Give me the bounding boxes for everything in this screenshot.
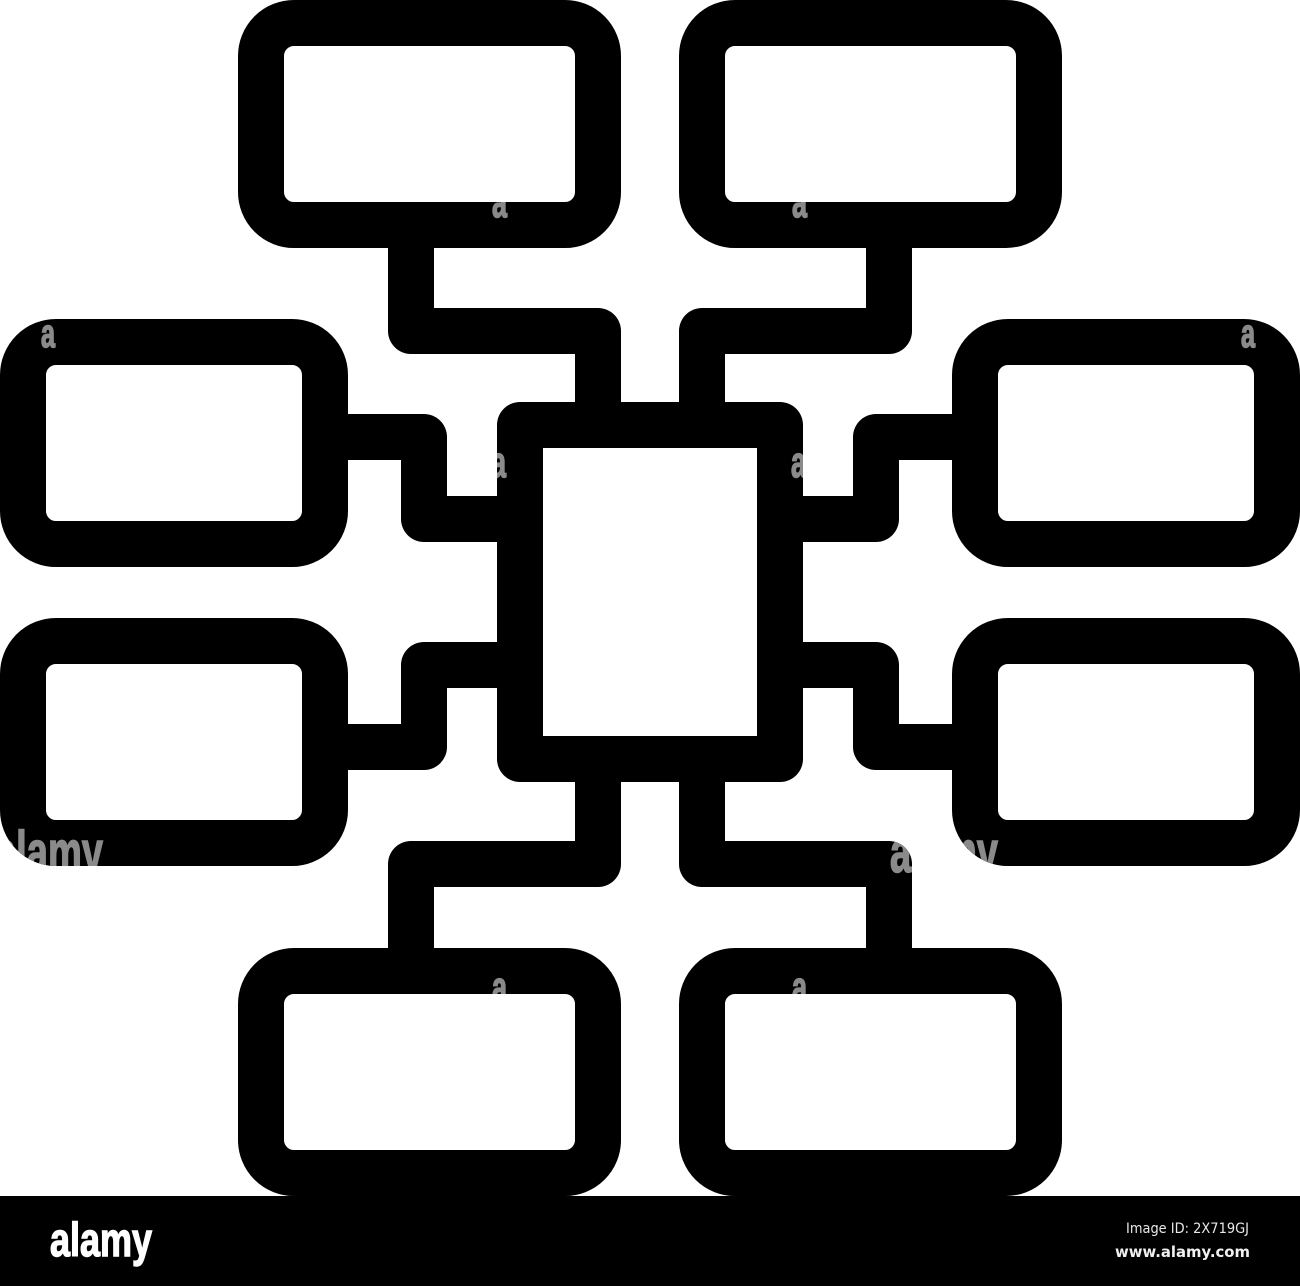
connector: upper right	[780, 437, 975, 519]
watermark marks over the diagram: a	[491, 438, 506, 487]
node box: upper left	[23, 342, 325, 544]
watermark marks over the diagram: a	[492, 963, 507, 1012]
node box: bottom right	[702, 971, 1039, 1173]
watermark marks over the diagram: a	[791, 438, 806, 487]
connector: lower left	[325, 665, 520, 747]
central hub box	[520, 425, 780, 759]
connector: bottom left	[411, 760, 598, 971]
node box: lower left	[23, 641, 325, 843]
node box: top left	[261, 23, 598, 225]
footer bar	[0, 1196, 1300, 1286]
connector: lower right	[780, 665, 975, 747]
node box: bottom left	[261, 971, 598, 1173]
watermark marks over the diagram: a	[1241, 312, 1255, 356]
connector: top right	[702, 225, 889, 425]
footer logo: alamy	[50, 1213, 152, 1266]
node box: top right	[702, 23, 1039, 225]
watermark marks over the diagram	[0, 178, 1255, 1012]
image id: Image ID: 2X719GJ	[1126, 1221, 1249, 1237]
watermark marks over the diagram: a	[492, 178, 507, 227]
connector: top left	[411, 225, 598, 425]
connector: upper left	[325, 437, 520, 519]
node box: upper right	[975, 342, 1277, 544]
footer background	[0, 1196, 1300, 1286]
watermark marks over the diagram: a	[792, 178, 807, 227]
watermark marks over the diagram: alamy	[890, 820, 998, 885]
connector: bottom right	[702, 760, 889, 971]
watermark marks over the diagram: a	[792, 963, 807, 1012]
website: www.alamy.com	[1115, 1243, 1250, 1261]
watermark marks over the diagram: a	[41, 312, 55, 356]
node box: lower right	[975, 641, 1277, 843]
